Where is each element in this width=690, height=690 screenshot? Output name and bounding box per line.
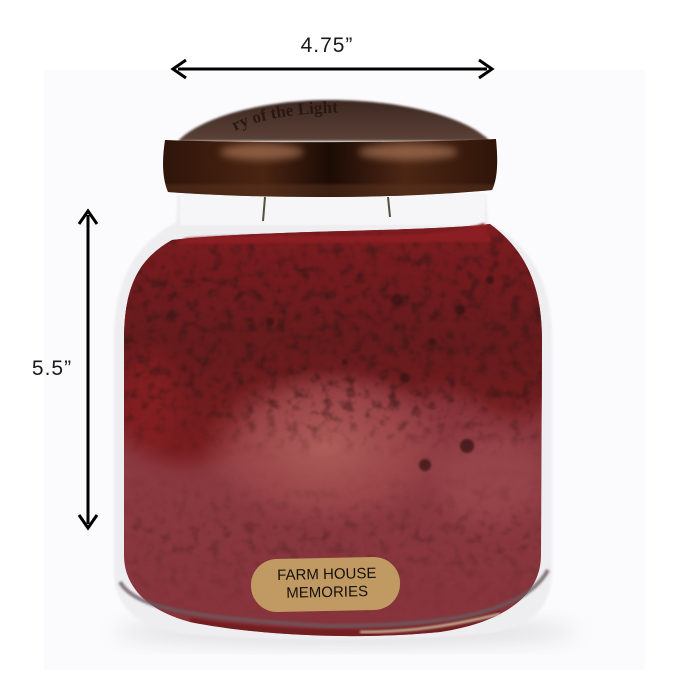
label background [250, 556, 401, 613]
glass base rim [120, 570, 548, 626]
right pink side [442, 442, 542, 520]
height label: 5.5” [32, 357, 72, 380]
pink centre patch [214, 376, 427, 514]
top wax mottling [124, 232, 542, 462]
glass base glint [360, 614, 500, 632]
height dimension arrow [79, 211, 97, 528]
dark red base band [189, 610, 500, 636]
left glass edge [118, 360, 122, 560]
width dimension arrow [173, 60, 492, 78]
ground shadow [115, 618, 575, 646]
bright red left shoulder [124, 350, 178, 440]
label text: FARM HOUSE [277, 565, 377, 584]
wax top surface [176, 223, 492, 244]
label: MEMORIES [286, 583, 368, 602]
width label: 4.75” [301, 34, 353, 57]
glass neck [180, 195, 485, 225]
label [250, 556, 401, 613]
embossed lid text: ry of the Light [232, 101, 338, 131]
glass jar body [114, 195, 552, 640]
wax fill [124, 224, 542, 636]
dark upper wax [110, 215, 560, 466]
right glass edge [545, 360, 549, 560]
candle jar [114, 98, 552, 639]
bottom wax mottling [126, 483, 541, 592]
photo background [44, 70, 645, 670]
lid [163, 98, 498, 197]
lid dome [178, 100, 490, 141]
wicks [263, 197, 390, 221]
wax speckles [266, 276, 494, 471]
lid band [163, 139, 498, 197]
